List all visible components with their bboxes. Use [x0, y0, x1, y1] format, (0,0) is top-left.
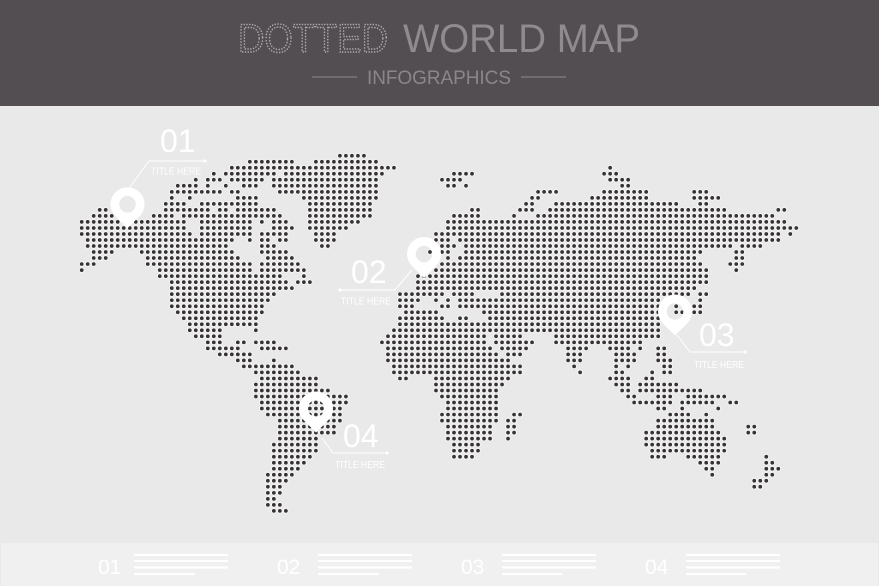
- leader end dot 01: [203, 159, 207, 163]
- label 03: TITLE HERE: [694, 360, 744, 371]
- footer number 01: 01: [98, 556, 121, 579]
- footer band: [1, 543, 878, 586]
- subtitle right rule: [521, 76, 566, 78]
- callout 02: [338, 237, 441, 308]
- leader line 04: [322, 438, 387, 453]
- title: dotted word: DOTTED: [238, 17, 388, 61]
- title: world map: WORLD MAP: [403, 17, 640, 61]
- footer text lines 02: [318, 555, 412, 574]
- Greenland dots: [304, 156, 394, 246]
- leader end dot 04: [385, 451, 389, 455]
- leader line 03: [677, 335, 745, 352]
- footer item 04: [645, 555, 780, 579]
- subtitle: INFOGRAPHICS: [367, 68, 511, 89]
- number 02: 02: [351, 254, 387, 290]
- label 02: TITLE HERE: [341, 296, 391, 308]
- dotted world map: [82, 156, 796, 511]
- leader line 01: [130, 161, 205, 187]
- Southeast Asia and Oceania dots: [610, 348, 778, 487]
- footer item 02: [277, 555, 412, 579]
- footer number 04: 04: [645, 556, 669, 579]
- footer number 02: 02: [277, 556, 300, 579]
- number 01: 01: [160, 123, 196, 159]
- leader end dot 02: [338, 288, 342, 292]
- callout 03: [658, 294, 747, 371]
- label 01: TITLE HERE: [151, 166, 201, 178]
- header band: [0, 0, 879, 106]
- pin 02: [407, 237, 441, 278]
- subtitle left rule: [312, 76, 357, 78]
- footer text lines 01: [134, 555, 228, 574]
- pin 01: [110, 187, 144, 228]
- footer text lines 03: [502, 555, 596, 574]
- number 03: 03: [699, 317, 735, 353]
- South America dots: [244, 366, 346, 511]
- North and Central America dots: [82, 162, 310, 360]
- footer item 01: [98, 555, 228, 579]
- leader line 02: [340, 270, 412, 290]
- number 04: 04: [343, 418, 379, 454]
- callout 04: [299, 391, 389, 471]
- footer text lines 04: [686, 555, 780, 574]
- footer item 03: [461, 555, 596, 579]
- label 04: TITLE HERE: [335, 460, 385, 471]
- footer number 03: 03: [461, 556, 484, 579]
- Eurasia and Africa dots: [382, 168, 796, 457]
- leader end dot 03: [743, 350, 747, 354]
- pin 03: [658, 294, 692, 336]
- callout 01: [110, 123, 207, 228]
- pin 04: [299, 391, 333, 432]
